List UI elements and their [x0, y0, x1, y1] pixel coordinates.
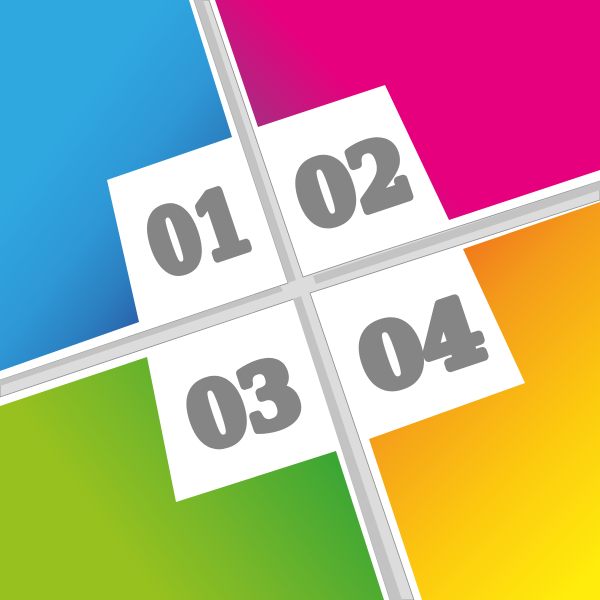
- panel: magenta: [215, 0, 600, 220]
- number 03: 03: [175, 340, 313, 471]
- panel: green: [0, 357, 384, 600]
- number 01: 01: [136, 170, 261, 297]
- number 04: 04: [347, 279, 495, 414]
- number 02: 02: [284, 119, 423, 250]
- panel: orange: [369, 202, 600, 600]
- panel: blue: [0, 0, 232, 371]
